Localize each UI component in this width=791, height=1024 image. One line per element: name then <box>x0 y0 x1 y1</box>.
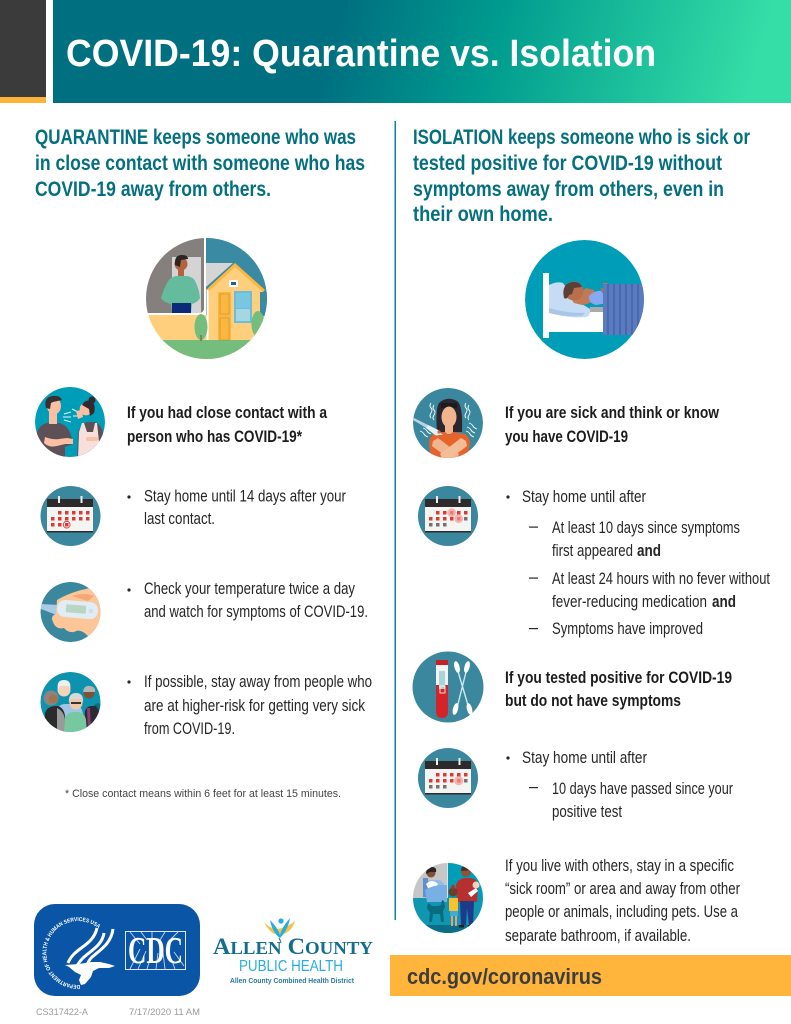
bullet: stay home until after (symptoms): Stay home until after <box>522 488 646 506</box>
CDC mark: CDC <box>128 930 183 972</box>
bullet: stay home 14 days <box>127 488 346 528</box>
logo: Allen County Public Health <box>213 918 373 985</box>
text: living with others: If you live with others, stay in a specific <box>505 857 734 875</box>
bullet: check temperature: Check your temperature twice a day <box>144 580 356 598</box>
subheading: close contact: If you had close contact with a <box>127 404 328 422</box>
print code <box>36 1007 200 1017</box>
text: living with others: “sick room” or area and away from other <box>505 880 740 898</box>
sub-bullet: 24 hours no fever: fever-reducing medication <box>552 593 707 611</box>
sub-bullet: 10 days passed <box>529 780 733 821</box>
icon: calendar 14 days <box>40 486 100 546</box>
logo: Allen County Public Health: PUBLIC HEALTH <box>239 958 343 975</box>
website banner: cdc.gov/coronavirus <box>407 964 602 989</box>
bullet: stay home until after (positive test) <box>506 749 733 821</box>
subheading: sick: If you are sick and think or know <box>505 404 719 422</box>
icon: family and sick room <box>413 863 483 933</box>
bullet: stay home 14 days: last contact. <box>144 510 215 528</box>
panel: isolation <box>412 125 770 945</box>
subheading: tested positive: but do not have symptoms <box>505 692 681 710</box>
icon: people in close contact <box>35 387 105 458</box>
sub-bullet: 24 hours no fever: and <box>712 593 736 611</box>
quarantine definition heading: QUARANTINE keeps someone who was <box>35 125 356 149</box>
bullet: stay home 14 days: Stay home until 14 days after your <box>144 488 346 506</box>
icon: person with fever <box>413 388 483 460</box>
subheading: tested positive <box>505 669 732 710</box>
icon: person at home and house <box>146 238 268 360</box>
icon: test tube and swabs <box>412 652 484 722</box>
logo: Allen County Public Health: ALLEN COUNTY <box>213 934 373 959</box>
isolation definition heading: their own home. <box>413 202 553 226</box>
isolation definition heading: tested positive for COVID-19 without <box>413 151 722 175</box>
bullet: stay away from higher-risk: from COVID-19. <box>144 720 235 738</box>
icon: person sick in bed <box>525 240 648 359</box>
bullet: stay away from higher-risk: If possible, stay away from people who <box>144 673 372 691</box>
quarantine definition heading: in close contact with someone who has <box>35 151 365 175</box>
quarantine definition heading <box>35 125 365 201</box>
bullet: check temperature <box>127 580 368 621</box>
footnote: * Close contact means within 6 feet for at least 15 minutes. <box>65 788 341 800</box>
column divider <box>394 121 396 920</box>
sub-bullet: at least 10 days: and <box>637 542 661 560</box>
logo figure <box>264 918 295 942</box>
icon: calendar positive test <box>418 748 478 808</box>
bullet: stay away from higher-risk: are at higher-risk for getting very sick <box>144 697 366 715</box>
sub-bullet: 10 days passed: positive test <box>552 803 622 821</box>
sub-bullet: 10 days passed: 10 days have passed since your <box>552 780 733 798</box>
text: living with others: people or animals, including pets. Use a <box>505 903 739 921</box>
header band <box>0 0 791 103</box>
title: COVID-19: Quarantine vs. Isolation <box>66 33 656 75</box>
bullet: check temperature: and watch for symptoms of COVID-19. <box>144 603 368 621</box>
logo: Allen County Public Health: Allen County Combined Health District <box>230 978 355 985</box>
subheading: sick: you have COVID-19 <box>505 428 628 446</box>
print code: 7/17/2020 11 AM <box>129 1007 200 1017</box>
bullet: stay away from higher-risk <box>127 673 372 738</box>
panel: quarantine <box>35 125 372 800</box>
subheading: tested positive: If you tested positive for COVID-19 <box>505 669 732 687</box>
sub-bullet: at least 10 days: At least 10 days since symptoms <box>552 519 740 537</box>
isolation definition heading <box>413 125 750 226</box>
bullet: stay home until after (positive test): Stay home until after <box>522 749 647 767</box>
sub-bullet: at least 10 days: first appeared <box>552 542 633 560</box>
website banner <box>390 955 791 996</box>
text: living with others <box>505 857 740 945</box>
icon: calendar 10 days <box>418 486 478 546</box>
sub-bullet: symptoms improved: Symptoms have improved <box>552 620 703 638</box>
text: living with others: separate bathroom, if available. <box>505 927 691 945</box>
sub-bullet: 24 hours no fever <box>529 570 770 611</box>
icon: older adults <box>40 672 102 733</box>
subheading: sick <box>505 404 719 446</box>
CDC mark <box>126 930 186 972</box>
logo: HHS and CDC <box>34 904 200 996</box>
subheading: close contact: person who has COVID-19* <box>127 428 302 446</box>
sub-bullet: at least 10 days <box>529 519 740 560</box>
quarantine definition heading: COVID-19 away from others. <box>35 177 271 201</box>
HHS eagle seal: DEPARTMENT OF HEALTH & HUMAN SERVICES USA <box>42 917 100 989</box>
isolation definition heading: symptoms away from others, even in <box>413 177 724 201</box>
icon: thermometer in hand <box>40 582 102 642</box>
print code: CS317422-A <box>36 1007 88 1017</box>
bullet: stay home until after (symptoms) <box>506 488 770 638</box>
subheading: close contact <box>127 404 328 446</box>
